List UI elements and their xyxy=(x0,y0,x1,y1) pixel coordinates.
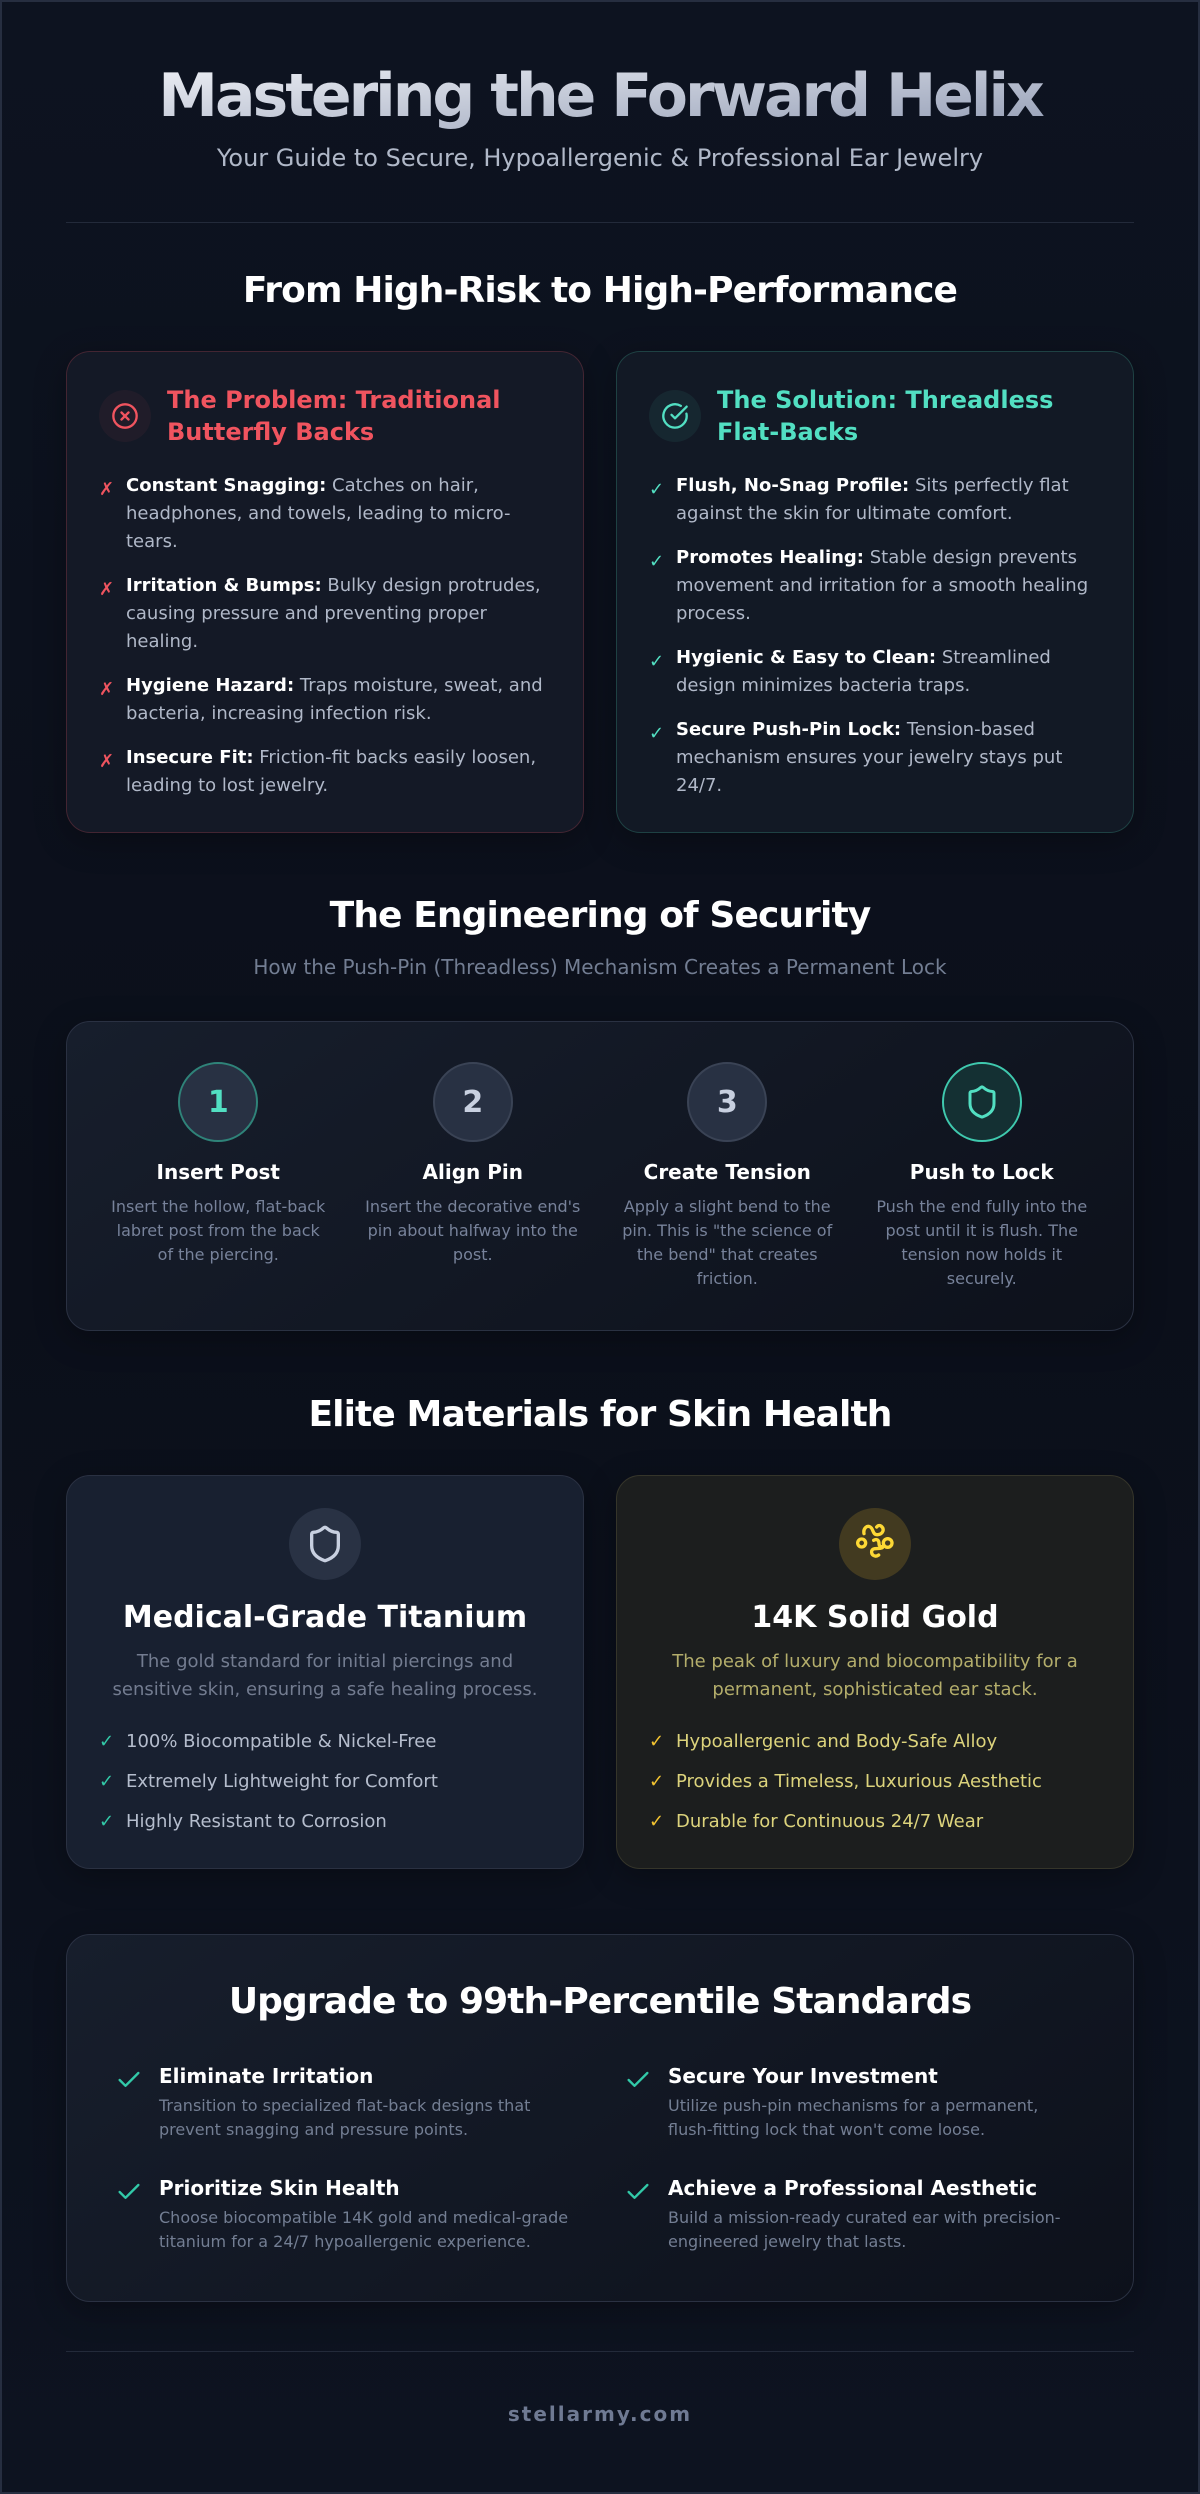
item title: Prioritize Skin Health xyxy=(159,2176,400,2200)
step 1 text: labret post from the back xyxy=(117,1220,320,1240)
step 4 text: securely. xyxy=(947,1268,1017,1288)
problem heading xyxy=(167,386,501,446)
step 4 text: Push the end fully into the xyxy=(876,1196,1087,1216)
problem list: Insecure Fit: Friction-fit backs easily loosen, xyxy=(126,746,536,768)
problem list xyxy=(99,474,543,796)
step 2 number: 2 xyxy=(462,1084,483,1120)
problem heading: The Problem: Traditional xyxy=(167,386,501,414)
panel: gold xyxy=(616,1475,1134,1869)
problem list: bacteria, increasing infection risk. xyxy=(126,702,432,724)
solution list: Hygienic & Easy to Clean: Streamlined xyxy=(676,646,1051,668)
gold benefits: Durable for Continuous 24/7 Wear xyxy=(676,1811,983,1832)
problem list: ✗ xyxy=(99,479,114,500)
item title: Eliminate Irritation xyxy=(159,2064,373,2088)
item text: titanium for a 24/7 hypoallergenic experience. xyxy=(159,2232,531,2250)
item text xyxy=(668,2208,1061,2250)
item text: Transition to specialized flat-back designs that xyxy=(159,2096,530,2114)
step 1 text: of the piercing. xyxy=(158,1244,279,1264)
step 1 text: Insert the hollow, flat-back xyxy=(111,1196,325,1216)
titanium benefits: ✓ xyxy=(99,1731,114,1752)
step 4 text xyxy=(876,1196,1087,1288)
panel: the problem xyxy=(66,351,584,833)
step 1 number xyxy=(178,1062,258,1142)
step 2 text: post. xyxy=(453,1244,493,1264)
gold benefits: ✓ xyxy=(649,1811,664,1832)
solution list xyxy=(649,474,1088,796)
step 4 title: Push to Lock xyxy=(910,1160,1054,1184)
panel: upgrade standards xyxy=(66,1934,1134,2302)
step 2 text: Insert the decorative end's xyxy=(365,1196,580,1216)
item: eliminate irritation xyxy=(118,2064,530,2138)
step 2 text: pin about halfway into the xyxy=(368,1220,578,1240)
problem list: ✗ xyxy=(99,679,114,700)
step 4 text: tension now holds it xyxy=(901,1244,1062,1264)
step 4 shield icon xyxy=(942,1062,1022,1142)
problem list: leading to lost jewelry. xyxy=(126,774,328,796)
step 3 xyxy=(622,1062,833,1288)
check icon xyxy=(628,2072,648,2088)
item: prioritize skin health xyxy=(118,2176,568,2250)
icon: check circle xyxy=(649,390,701,442)
step 3 text: friction. xyxy=(697,1268,758,1288)
step 1 number: 1 xyxy=(208,1084,229,1120)
icon: gold loops xyxy=(839,1508,911,1580)
gold description xyxy=(672,1651,1078,1700)
heading: the engineering of security: The Engineering of Security xyxy=(330,894,870,936)
subtitle: Your Guide to Secure, Hypoallergenic & Professional Ear Jewelry xyxy=(217,144,983,172)
gold description: The peak of luxury and biocompatibility for a xyxy=(672,1651,1078,1672)
panel: titanium xyxy=(66,1475,584,1869)
step 2 number xyxy=(433,1062,513,1142)
problem list: tears. xyxy=(126,530,178,552)
step 1 xyxy=(111,1062,326,1264)
gold benefits: Provides a Timeless, Luxurious Aesthetic xyxy=(676,1771,1042,1792)
solution list: movement and irritation for a smooth healing xyxy=(676,574,1088,596)
solution list: Promotes Healing: Stable design prevents xyxy=(676,546,1077,568)
titanium benefits: 100% Biocompatible & Nickel-Free xyxy=(126,1731,436,1752)
titanium description: sensitive skin, ensuring a safe healing process. xyxy=(113,1679,537,1700)
step 3 title: Create Tension xyxy=(644,1160,811,1184)
gold benefits xyxy=(649,1731,1042,1832)
solution list: 24/7. xyxy=(676,774,722,796)
item title: Secure Your Investment xyxy=(668,2064,938,2088)
solution list: ✓ xyxy=(649,723,664,744)
gold title: 14K Solid Gold xyxy=(751,1600,999,1635)
solution list: design minimizes bacteria traps. xyxy=(676,674,970,696)
titanium title: Medical-Grade Titanium xyxy=(123,1600,527,1635)
item title: Achieve a Professional Aesthetic xyxy=(668,2176,1037,2200)
icon: x circle xyxy=(99,390,151,442)
item text xyxy=(668,2096,1038,2138)
solution list: Secure Push-Pin Lock: Tension-based xyxy=(676,718,1035,740)
step 2 xyxy=(365,1062,580,1264)
gold description: permanent, sophisticated ear stack. xyxy=(712,1679,1038,1700)
solution heading xyxy=(717,386,1053,446)
solution heading: Flat-Backs xyxy=(717,418,858,446)
title: Mastering the Forward Helix xyxy=(158,61,1042,131)
titanium benefits: ✓ xyxy=(99,1811,114,1832)
solution list: Flush, No-Snag Profile: Sits perfectly flat xyxy=(676,474,1069,496)
item text xyxy=(159,2208,568,2250)
step 1 title: Insert Post xyxy=(157,1160,280,1184)
step 1 text xyxy=(111,1196,326,1264)
titanium description xyxy=(113,1651,537,1700)
titanium benefits: Highly Resistant to Corrosion xyxy=(126,1811,387,1832)
problem list: Irritation & Bumps: Bulky design protrudes, xyxy=(126,574,541,596)
solution list: ✓ xyxy=(649,551,664,572)
problem list: headphones, and towels, leading to micro- xyxy=(126,502,511,524)
step 3 number: 3 xyxy=(717,1084,738,1120)
heading: from high-risk to high-performance: From High-Risk to High-Performance xyxy=(243,270,957,311)
solution heading: The Solution: Threadless xyxy=(717,386,1053,414)
titanium benefits: Extremely Lightweight for Comfort xyxy=(126,1771,438,1792)
item text xyxy=(158,2096,530,2138)
item: achieve a professional aesthetic xyxy=(628,2176,1061,2250)
solution list: ✓ xyxy=(649,479,664,500)
icon: shield xyxy=(289,1508,361,1580)
titanium benefits: ✓ xyxy=(99,1771,114,1792)
solution list: process. xyxy=(676,602,751,624)
item text: Choose biocompatible 14K gold and medical-grade xyxy=(159,2208,568,2226)
item text: engineered jewelry that lasts. xyxy=(668,2232,906,2250)
footer brand: stellarmy.com xyxy=(508,2402,692,2426)
check icon xyxy=(118,2072,140,2088)
check icon xyxy=(628,2184,648,2200)
problem list: healing. xyxy=(126,630,198,652)
solution list: mechanism ensures your jewelry stays put xyxy=(676,746,1062,768)
step 4 text: post until it is flush. The xyxy=(886,1220,1078,1240)
solution list: against the skin for ultimate comfort. xyxy=(676,502,1013,524)
item text: prevent snagging and pressure points. xyxy=(159,2120,468,2138)
panel: the solution xyxy=(616,351,1134,833)
titanium description: The gold standard for initial piercings and xyxy=(137,1651,513,1672)
gold benefits: Hypoallergenic and Body-Safe Alloy xyxy=(676,1731,997,1752)
problem list: Constant Snagging: Catches on hair, xyxy=(126,474,479,496)
item: secure your investment xyxy=(628,2064,1038,2138)
item text: Utilize push-pin mechanisms for a permanent, xyxy=(668,2096,1038,2114)
check icon xyxy=(118,2184,140,2200)
step 4 xyxy=(876,1062,1087,1288)
heading: elite materials: Elite Materials for Skin Health xyxy=(308,1394,892,1435)
item text: flush-fitting lock that won't come loose. xyxy=(668,2120,985,2138)
step 2 title: Align Pin xyxy=(423,1160,523,1184)
step 2 text xyxy=(365,1196,580,1264)
step 3 text: pin. This is "the science of xyxy=(622,1220,832,1240)
gold benefits: ✓ xyxy=(649,1771,664,1792)
step 3 text xyxy=(622,1196,833,1288)
step 3 text: Apply a slight bend to the xyxy=(624,1196,831,1216)
problem list: Hygiene Hazard: Traps moisture, sweat, and xyxy=(126,674,543,696)
problem list: ✗ xyxy=(99,579,114,600)
panel: steps xyxy=(66,1021,1134,1331)
problem list: ✗ xyxy=(99,751,114,772)
step 3 text: the bend" that creates xyxy=(637,1244,818,1264)
upgrade heading: Upgrade to 99th-Percentile Standards xyxy=(229,1981,971,2022)
problem list: causing pressure and preventing proper xyxy=(126,602,487,624)
gold benefits: ✓ xyxy=(649,1731,664,1752)
solution list: ✓ xyxy=(649,651,664,672)
problem heading: Butterfly Backs xyxy=(167,418,374,446)
step 3 number xyxy=(687,1062,767,1142)
subheading: push-pin mechanism: How the Push-Pin (Threadless) Mechanism Creates a Permanent Lock xyxy=(253,955,947,979)
item text: Build a mission-ready curated ear with precision- xyxy=(668,2208,1061,2226)
titanium benefits xyxy=(99,1731,438,1832)
